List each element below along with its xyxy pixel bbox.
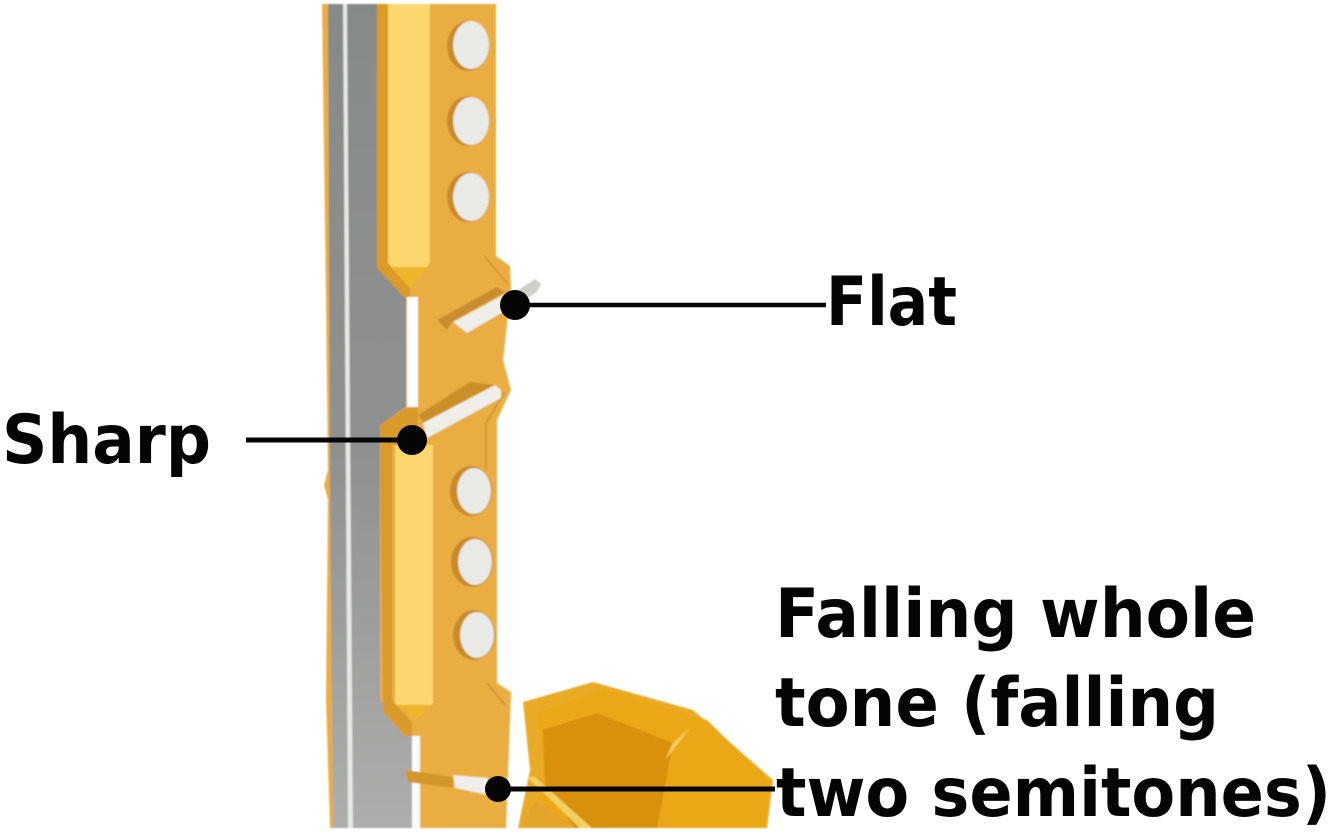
callout: flat [500, 263, 957, 342]
flat pin [437, 279, 541, 333]
callout: sharp [2, 401, 427, 480]
white highlight line [343, 4, 353, 828]
bell cup [518, 682, 773, 828]
instrument body [322, 4, 773, 828]
key buttons [447, 21, 495, 660]
gold main body [322, 4, 511, 828]
callout: falling whole tone [485, 575, 1331, 833]
sharp pin [418, 382, 501, 438]
crease lines [484, 256, 507, 706]
white slot lower [412, 736, 420, 828]
callout: flat: Flat [826, 263, 957, 342]
gray metal strip [328, 4, 412, 828]
callout: falling whole tone: Falling whole [775, 575, 1256, 654]
upper yellow rail [377, 4, 430, 298]
white slot upper [407, 297, 418, 407]
callout: falling whole tone: tone (falling [775, 664, 1219, 743]
callout: sharp: Sharp [2, 401, 211, 480]
falling tone pin [405, 770, 488, 795]
lower yellow rail [380, 407, 433, 736]
